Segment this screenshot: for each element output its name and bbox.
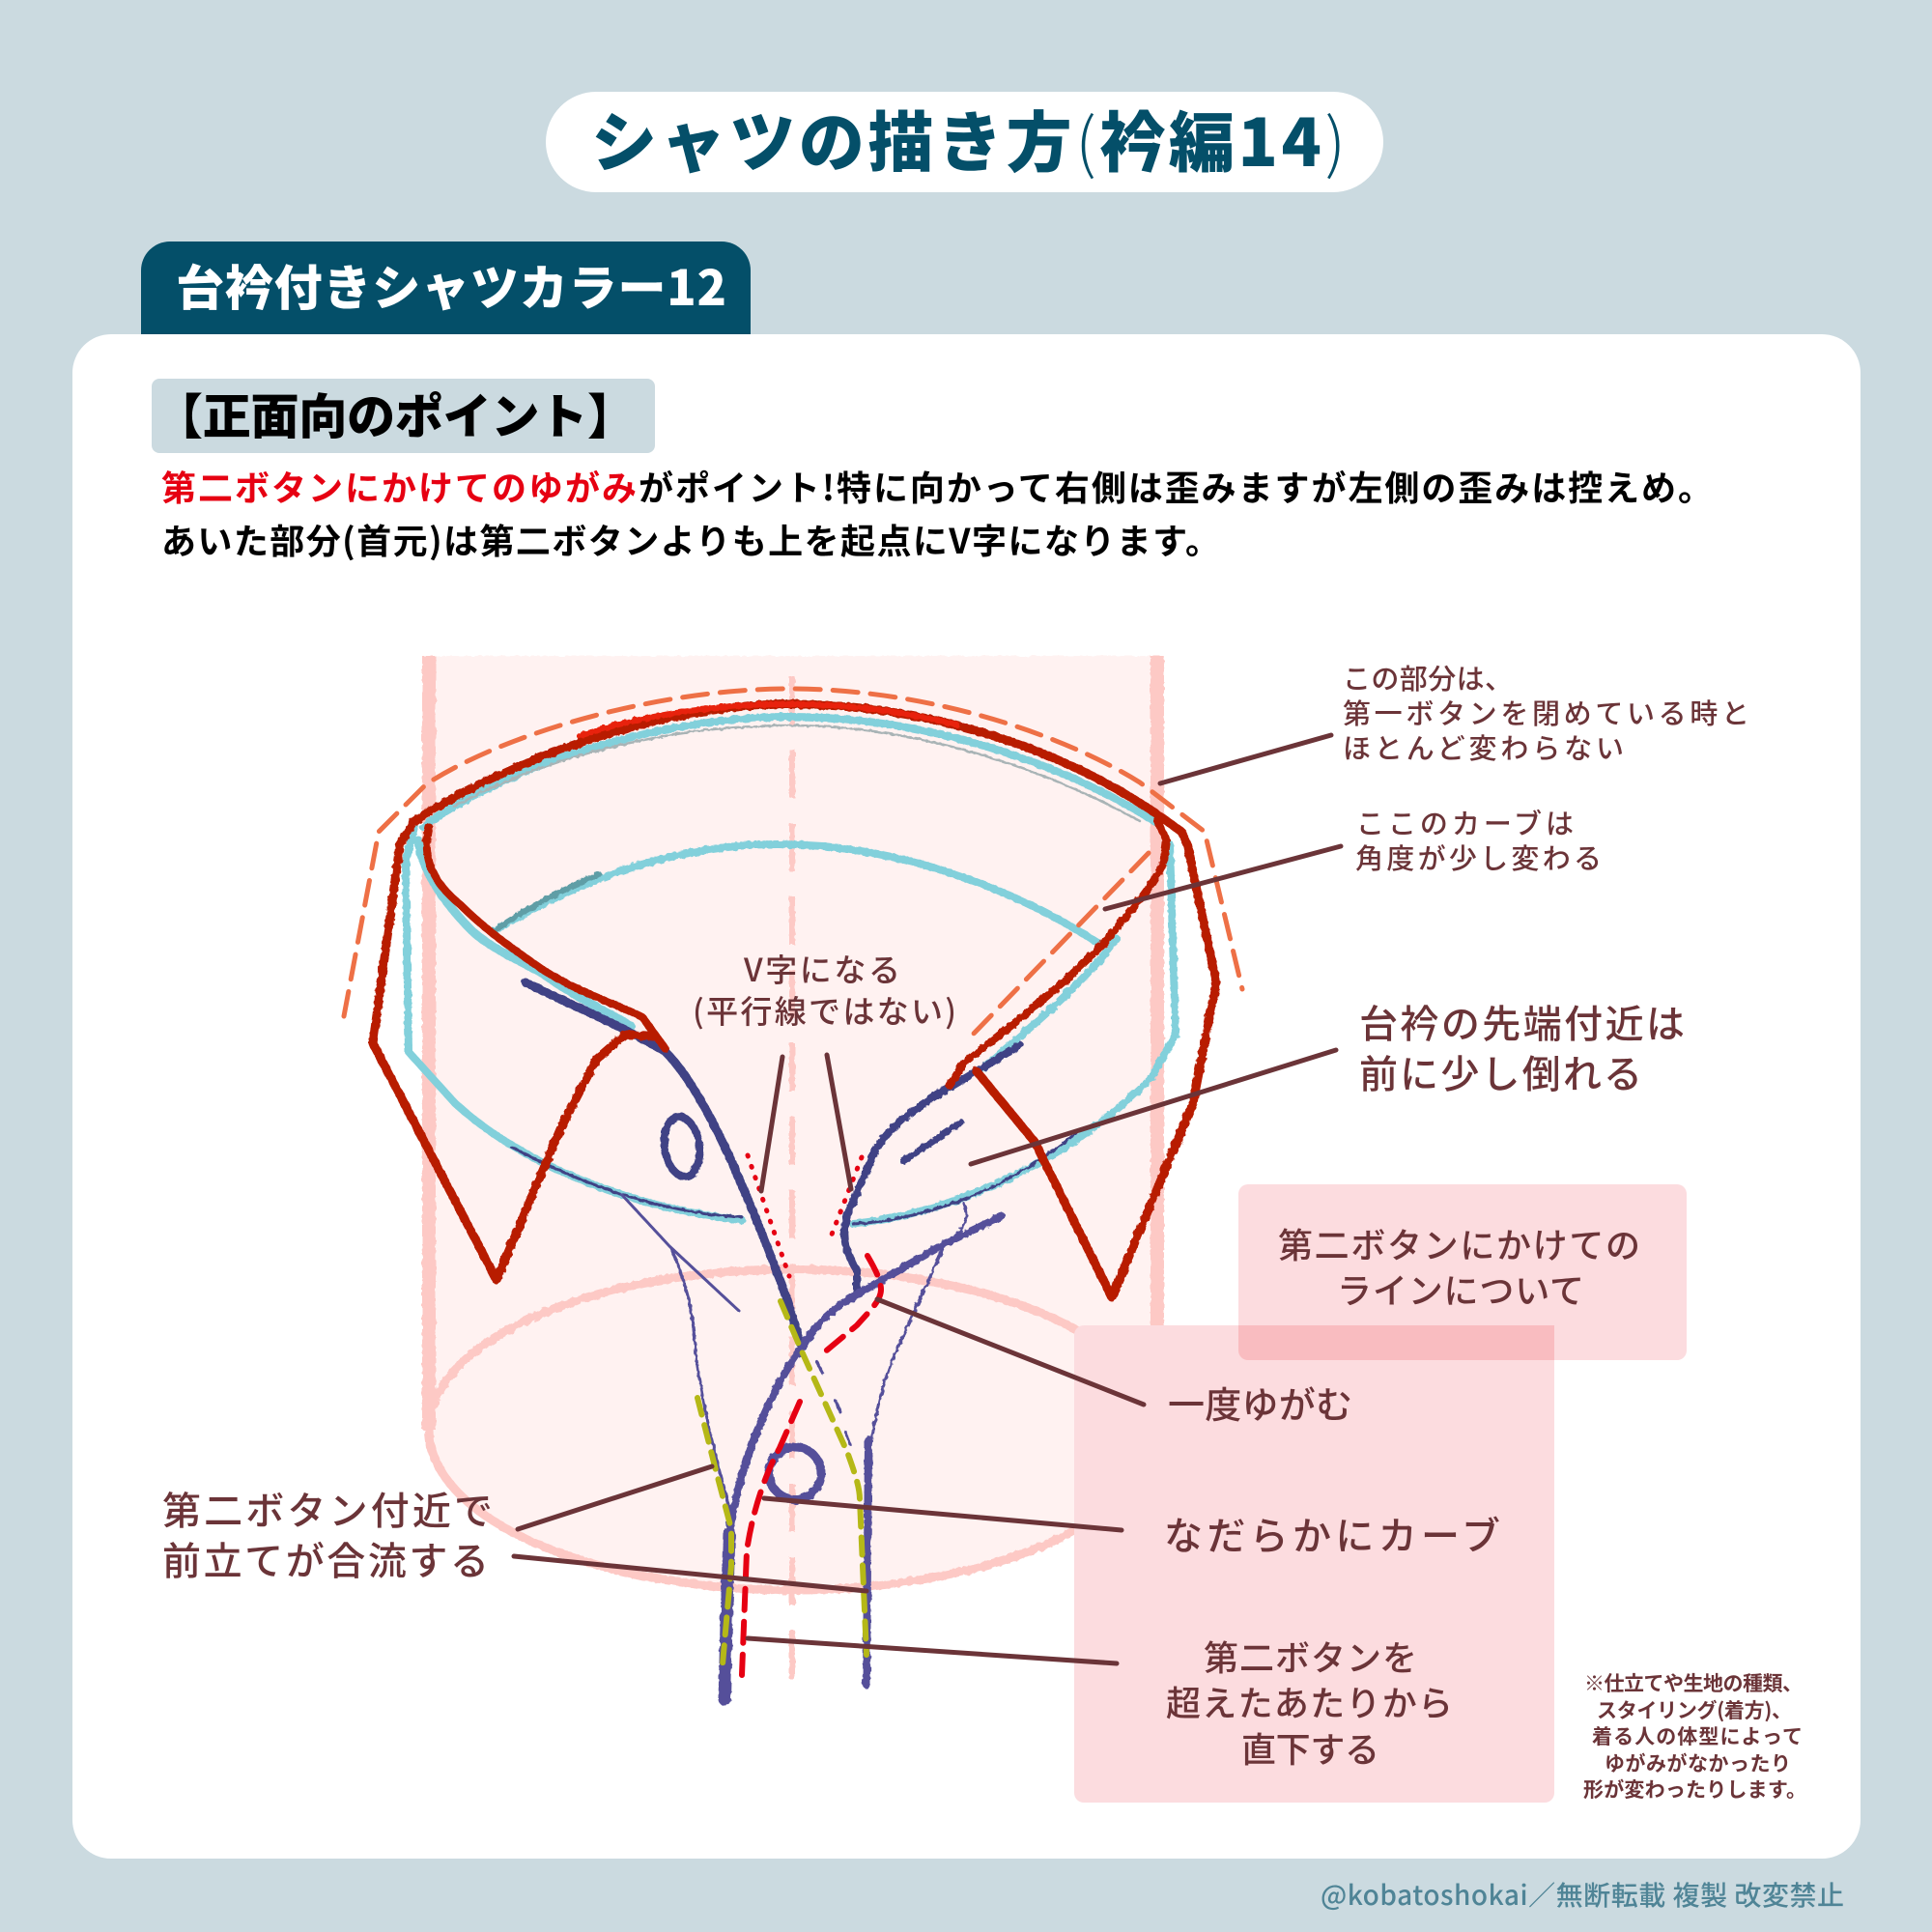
note: this part unchanged: ほとんど変わらない	[1343, 726, 1624, 767]
orange dashed outline	[344, 689, 1242, 1037]
description text: がポイント!特に向かって右側は歪みますが左側の歪みは控えめ。	[639, 461, 1713, 511]
green dashed line	[697, 1301, 867, 1664]
note: V shape: V字になる	[743, 945, 900, 991]
callout box: second button line	[1238, 1184, 1687, 1360]
collar stand teal lines	[406, 717, 1176, 1224]
footnote	[1583, 1668, 1806, 1804]
guide dashes	[344, 689, 1242, 1675]
panel: main	[72, 334, 1861, 1859]
description text	[161, 461, 1713, 564]
leader lines	[514, 735, 1341, 1663]
callout box: line details	[1074, 1325, 1554, 1803]
red dashed line	[742, 1256, 881, 1675]
collar red outline	[373, 704, 1216, 1297]
callout text: distorts once: 一度ゆがむ	[1168, 1376, 1352, 1429]
note: collar stand tip: 台衿の先端付近は	[1359, 993, 1685, 1049]
note: V shape: (平行線ではない)	[693, 986, 956, 1033]
note: collar stand tip	[1359, 993, 1685, 1099]
callout text: straight down	[1166, 1631, 1453, 1773]
note: placket merge: 前立てが合流する	[162, 1530, 489, 1586]
note: this part unchanged: この部分は、	[1343, 657, 1513, 697]
footnote: スタイリング(着方)、	[1597, 1695, 1792, 1724]
note: this part unchanged: 第一ボタンを閉めている時と	[1343, 692, 1749, 732]
note: curve angle: 角度が少し変わる	[1355, 837, 1602, 877]
callout text: about the line: 第二ボタンにかけての	[1278, 1218, 1640, 1268]
title: シャツの描き方(衿編14)	[591, 90, 1346, 185]
body guide: pale neck cylinder	[429, 656, 1157, 1700]
callout text: straight down: 第二ボタンを	[1204, 1631, 1417, 1681]
heading: front view points: 【正面向のポイント】	[155, 379, 636, 448]
callout text: straight down: 超えたあたりから	[1166, 1676, 1453, 1726]
callout text: about the line	[1278, 1218, 1640, 1314]
red dotted lines	[748, 1155, 862, 1276]
note: placket merge: 第二ボタン付近で	[162, 1480, 493, 1536]
note: curve angle: ここのカーブは	[1356, 802, 1574, 842]
section tab: 台衿付きシャツカラー12	[176, 250, 726, 320]
note: collar stand tip: 前に少し倒れる	[1359, 1043, 1642, 1099]
footnote: 形が変わったりします。	[1583, 1775, 1806, 1804]
description text: 第二ボタンにかけてのゆがみ	[161, 461, 637, 511]
footnote: ※仕立てや生地の種類、	[1584, 1668, 1803, 1697]
callout text: about the line: ラインについて	[1337, 1264, 1584, 1314]
shirt front purple lines	[621, 1194, 1002, 1699]
collar illustration	[373, 704, 1216, 1699]
dark teal and gray shading	[454, 725, 1140, 931]
note: curve angle	[1355, 802, 1602, 877]
note: placket merge	[162, 1480, 493, 1586]
section tab	[141, 242, 751, 334]
callout text: straight down: 直下する	[1241, 1722, 1379, 1773]
front edge navy lines	[511, 982, 1076, 1348]
footnote: ゆがみがなかったり	[1605, 1748, 1791, 1777]
description text: あいた部分(首元)は第二ボタンよりも上を起点にV字になります。	[161, 514, 1220, 564]
note: V shape	[693, 945, 956, 1033]
footnote: 着る人の体型によって	[1592, 1721, 1803, 1750]
note: this part unchanged	[1343, 657, 1749, 767]
credit footer: @kobatoshokai／無断転載 複製 改変禁止	[1321, 1875, 1844, 1914]
callout text: gentle curve: なだらかにカーブ	[1164, 1505, 1500, 1561]
